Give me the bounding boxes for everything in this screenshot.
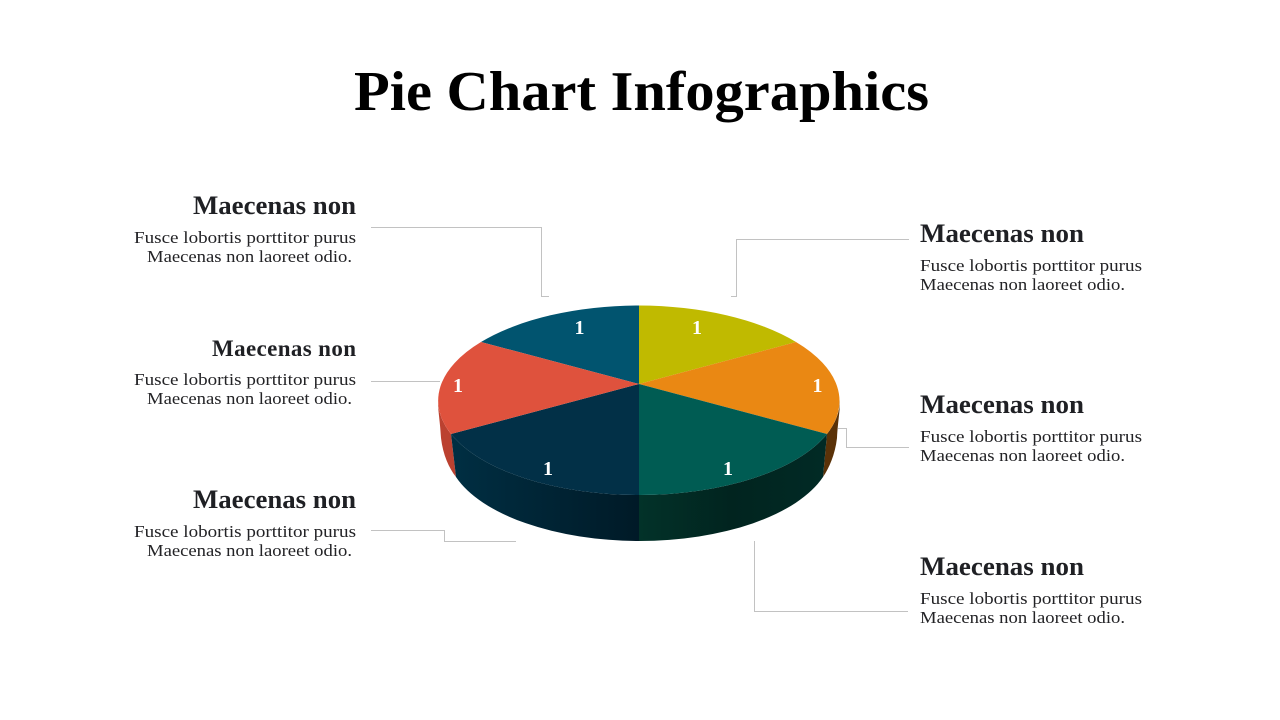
slice: teal [639, 384, 827, 495]
connector line: bottom right [754, 541, 908, 612]
value labels: 1 [453, 375, 463, 397]
slice: navy [451, 384, 639, 495]
connector line: top right [731, 240, 909, 296]
text block: middle right: Maecenas non [920, 390, 1085, 419]
text block: top left: Maecenas non [193, 191, 357, 220]
side: navy [451, 434, 639, 541]
side: red [438, 400, 456, 477]
text block: bottom left [134, 485, 357, 560]
text block: top left: Fusce lobortis porttitor purus [134, 228, 356, 247]
title: Pie Chart Infographics [354, 61, 929, 123]
text block: middle left [134, 336, 356, 408]
text block: top right [920, 219, 1142, 294]
text block: middle left: Maecenas non laoreet odio. [147, 389, 352, 408]
value labels: 1 [574, 317, 584, 339]
text block: middle right [920, 390, 1142, 465]
connector line: bottom left [371, 530, 516, 542]
value labels: 1 [543, 458, 553, 480]
text block: bottom left: Fusce lobortis porttitor purus [134, 522, 356, 541]
text block: top right: Maecenas non [920, 219, 1085, 248]
text block: top right: Fusce lobortis porttitor purus [920, 256, 1142, 275]
text block: bottom right: Maecenas non [920, 552, 1085, 581]
text block: middle right: Maecenas non laoreet odio. [920, 446, 1125, 465]
slice: orange [639, 342, 839, 434]
value labels: 1 [812, 375, 822, 397]
text block: top left [134, 191, 357, 266]
side: orange [823, 400, 840, 477]
slice: red [438, 342, 639, 434]
text block: bottom right [920, 552, 1142, 627]
connector line: middle right [838, 428, 909, 448]
value labels: 1 [692, 317, 702, 339]
slice: yellow [639, 306, 796, 384]
text block: bottom left: Maecenas non [193, 485, 357, 514]
value labels: 1 [723, 458, 733, 480]
side: teal [639, 434, 827, 541]
connector line: top left [371, 228, 549, 296]
slice: blue [481, 306, 639, 384]
connector line: middle left [371, 380, 440, 382]
text block: bottom left: Maecenas non laoreet odio. [147, 541, 352, 560]
3D pie chart [438, 306, 840, 541]
text block: middle left: Maecenas non [212, 336, 356, 361]
text block: middle left: Fusce lobortis porttitor purus [134, 370, 356, 389]
text block: top left: Maecenas non laoreet odio. [147, 247, 352, 266]
text block: bottom right: Maecenas non laoreet odio. [920, 608, 1125, 627]
text block: middle right: Fusce lobortis porttitor purus [920, 427, 1142, 446]
text block: bottom right: Fusce lobortis porttitor purus [920, 589, 1142, 608]
value labels [453, 317, 822, 480]
text block: top right: Maecenas non laoreet odio. [920, 275, 1125, 294]
